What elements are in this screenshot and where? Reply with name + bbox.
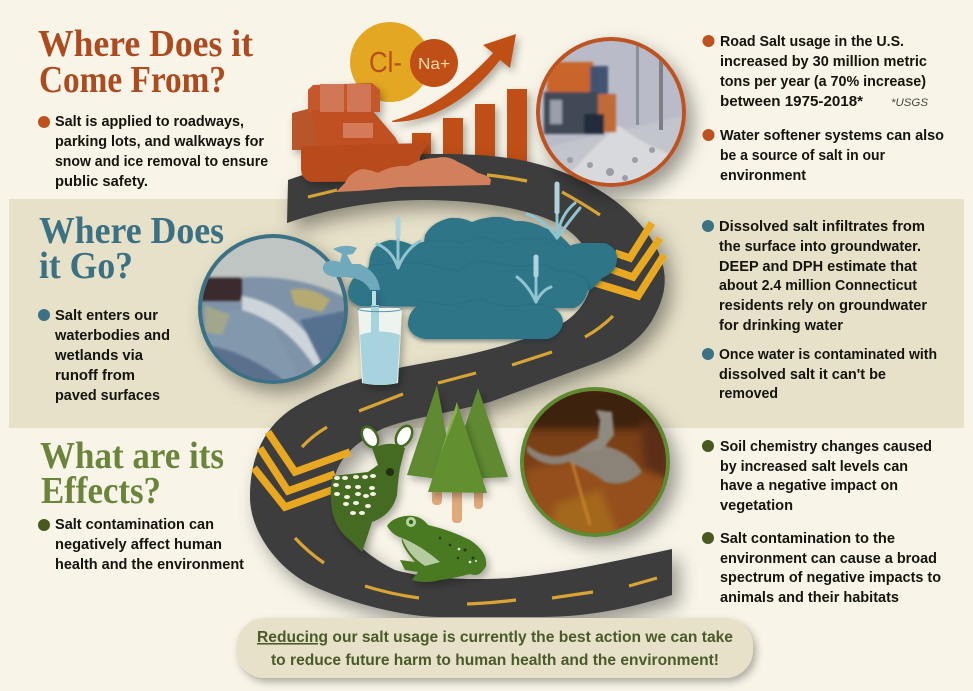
road chevrons right <box>592 223 664 296</box>
text block: groundwater: residents rely on groundwater <box>719 298 927 314</box>
text block: salt enters waterbodies: Salt enters our <box>55 308 158 324</box>
text block: salt applied <box>38 114 268 190</box>
text block: groundwater: Dissolved salt infiltrates from <box>719 219 925 235</box>
bulldozer plow <box>292 83 428 182</box>
text block: contamination effects: negatively affect human <box>55 537 222 553</box>
illustration: fawn <box>331 423 416 552</box>
photo: outfall pipe into water <box>198 234 350 385</box>
text block: salt enters waterbodies <box>38 308 170 404</box>
heading: where does it go <box>39 210 224 287</box>
text block: road salt usage: tons per year (a 70% increase) <box>720 74 926 90</box>
text block: salt applied: parking lots, and walkways for <box>55 134 264 150</box>
text block: contamination permanent: removed <box>719 386 778 402</box>
salt pile <box>336 157 491 192</box>
callout: reducing salt usage: Reducing our salt usage is currently the best action we can take <box>257 629 733 646</box>
text block: soil chemistry <box>702 439 932 514</box>
heading: what are its effects: What are its <box>40 435 224 477</box>
text block: groundwater: DEEP and DPH estimate that <box>719 259 917 275</box>
icon: water glass <box>358 291 402 385</box>
text block: road salt usage: increased by 30 million metric <box>720 54 927 70</box>
text block: contamination permanent: dissolved salt it can't be <box>719 367 886 383</box>
photo: frog in leaf litter <box>520 387 670 540</box>
callout: reducing salt usage: to reduce future harm to human health and the environment! <box>271 652 719 669</box>
text block: contamination permanent: Once water is contaminated with <box>719 347 937 363</box>
text block: groundwater <box>702 219 927 334</box>
text block: soil chemistry: by increased salt levels can <box>720 459 908 475</box>
text block: salt enters waterbodies: runoff from <box>55 368 135 384</box>
callout: reducing salt usage <box>236 618 753 678</box>
text block: contamination effects: health and the environment <box>55 557 244 573</box>
text block: salt enters waterbodies: waterbodies and <box>54 328 170 344</box>
text block: animal habitats: animals and their habitats <box>720 590 899 606</box>
text block: road salt usage: between 1975-2018* <box>720 94 863 110</box>
icon: cattail reeds <box>377 184 580 302</box>
text block: contamination effects: Salt contamination can <box>55 517 214 533</box>
heading: what are its effects: Effects? <box>41 470 161 512</box>
text block: salt applied: Salt is applied to roadways, <box>55 114 244 130</box>
text block: soil chemistry: Soil chemistry changes caused <box>720 439 932 455</box>
text block: road salt usage: *USGS <box>891 97 929 109</box>
text block: salt enters waterbodies: wetlands via <box>54 348 144 364</box>
text block: salt applied: snow and ice removal to ensure <box>55 154 268 170</box>
text block: groundwater: the surface into groundwater. <box>719 239 921 255</box>
icon: salt ions <box>350 22 458 102</box>
illustration: frog <box>387 516 486 582</box>
arrow: rising trend <box>392 34 516 122</box>
heading: where does it come from: Come From? <box>39 59 226 101</box>
text block: road salt usage: Road Salt usage in the U.S. <box>720 34 904 50</box>
icon: water faucet <box>323 246 380 290</box>
text block: animal habitats: spectrum of negative impacts to <box>720 570 941 586</box>
heading: where does it come from: Where Does it <box>38 23 253 65</box>
text block: groundwater: for drinking water <box>719 318 843 334</box>
text block: salt enters waterbodies: paved surfaces <box>55 388 160 404</box>
text block: water softeners: Water softener systems can also <box>720 128 944 144</box>
heading: what are its effects <box>40 435 224 512</box>
text block: animal habitats <box>702 531 941 606</box>
heading: where does it come from <box>38 23 253 101</box>
text block: water softeners: be a source of salt in our <box>720 148 885 164</box>
text block: road salt usage <box>702 34 929 110</box>
road <box>250 154 672 617</box>
heading: where does it go: it Go? <box>39 245 133 287</box>
text block: contamination permanent <box>702 347 937 402</box>
text block: animal habitats: environment can cause a broad <box>720 551 937 567</box>
text block: salt applied: public safety. <box>55 174 148 190</box>
illustration: wetland mounds <box>348 217 617 339</box>
road dashes <box>295 175 657 604</box>
icon: salt ions: Na+ <box>418 56 450 73</box>
text block: water softeners <box>702 128 944 184</box>
text block: soil chemistry: vegetation <box>720 498 793 514</box>
text block: groundwater: about 2.4 million Connecticut <box>719 278 917 294</box>
text block: contamination effects <box>38 517 244 573</box>
icon: salt ions: Cl- <box>369 47 402 79</box>
heading: where does it go: Where Does <box>39 210 224 252</box>
text block: water softeners: environment <box>720 168 806 184</box>
photo: snow plow truck <box>535 35 690 190</box>
road chevrons left <box>254 432 350 507</box>
bar chart <box>412 89 527 173</box>
text block: animal habitats: Salt contamination to the <box>720 531 895 547</box>
panel: where does it go band <box>9 199 964 428</box>
illustration: pine trees <box>407 385 508 523</box>
text block: soil chemistry: have a negative impact on <box>720 478 898 494</box>
